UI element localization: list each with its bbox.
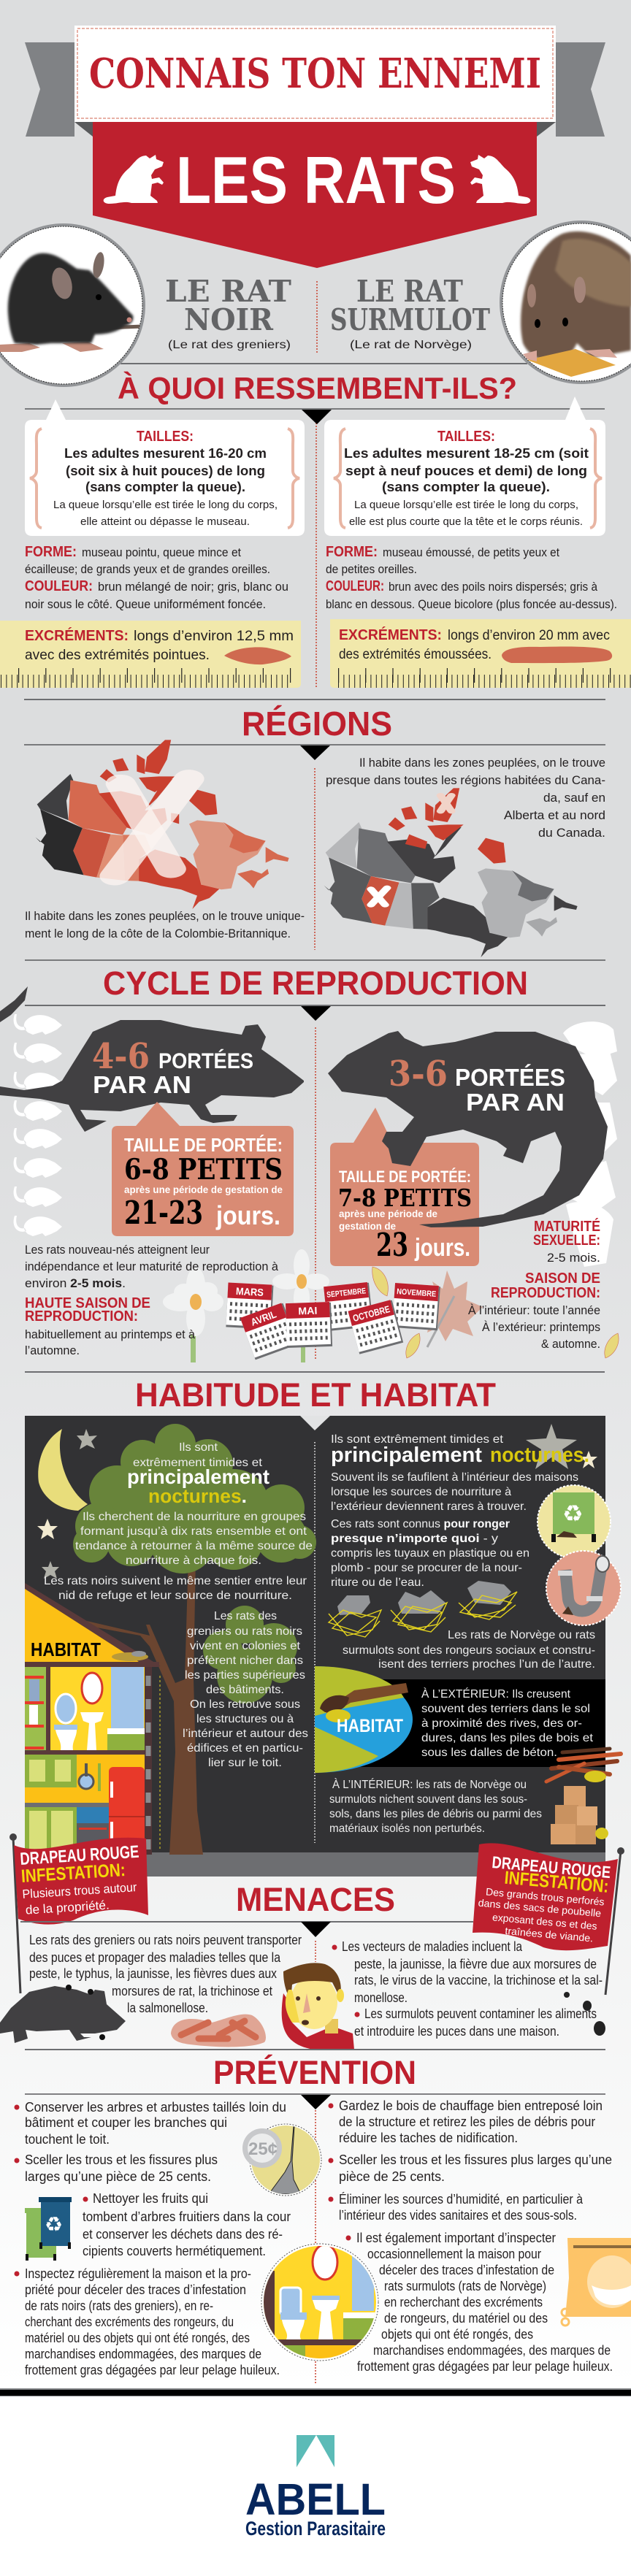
text: colonies, black rat: greniers ou rats noirs xyxy=(187,1625,302,1638)
text: maturity and season, brown rat: 2-5 mois. xyxy=(547,1251,600,1265)
text: prevention list, right: en recherchant des excréments xyxy=(384,2295,543,2309)
text: prevention list, left: priété pour déceler des traces d’infestation xyxy=(25,2282,246,2297)
text: night habits, black rat: principalement xyxy=(127,1465,269,1488)
text: prevention list, left: cherchant des excréments des rongeurs, du xyxy=(25,2315,234,2329)
text: night habits, brown rat: compris les tuyaux en plastique ou en xyxy=(331,1547,529,1560)
rat silhouette tail under: callout, brown rat: 23 xyxy=(376,1227,408,1264)
flag: red flag, black rat: DRAPEAU ROUGE xyxy=(20,1842,139,1869)
icon: wall crack and quarter xyxy=(242,2124,321,2196)
rat silhouette tail under: callout, brown rat: 7-8 PETITS xyxy=(338,1184,472,1212)
text: prevention list, right: pièce de 25 cents. xyxy=(339,2169,445,2184)
text: prevention list, left: de rats noirs (rats des greniers), en re- xyxy=(25,2299,213,2313)
text: range, brown rat: da, sauf en xyxy=(543,791,605,805)
text: prevention list, left: Inspectez régulièrement la maison et la pro- xyxy=(25,2266,251,2281)
icon: daisies xyxy=(163,1249,329,1362)
icon: wall crack and quarter: 25¢ xyxy=(248,2139,278,2159)
ruler panel: droppings, black rat xyxy=(0,621,301,688)
icon: autumn leaves xyxy=(372,1267,619,1358)
rat silhouette: black rat: PORTÉES xyxy=(158,1049,253,1073)
text: prevention list, left: frottement gras dégagées par leur pelage huileux. xyxy=(25,2363,280,2377)
text: range, black rat xyxy=(25,909,305,940)
icon: wood pile xyxy=(546,1749,621,1782)
panel: size, brown rat: elle est plus courte que la tête et le corps réunis. xyxy=(349,515,583,528)
text: night habits, brown rat xyxy=(331,1433,589,1589)
text: maturity and season, brown rat xyxy=(468,1218,600,1351)
panel: outdoor habitat: souvent des terriers dans le sol xyxy=(421,1703,590,1715)
text: prevention list, right: objets qui ont été rongés, des xyxy=(381,2327,533,2342)
icon: calendars: MAI xyxy=(298,1305,318,1316)
text: night habits, brown rat: Ils sont extrêmement timides et xyxy=(331,1433,504,1446)
text: threats, brown rat: rats, le virus de la vaccine, la trichinose et la sal- xyxy=(354,1973,603,1987)
panel: size, black rat: elle atteint ou dépasse le museau. xyxy=(80,515,250,528)
photo: brown rat xyxy=(500,221,631,384)
logo: Abell xyxy=(245,2435,386,2539)
text: maturity and season, brown rat: REPRODUCTION: xyxy=(491,1285,600,1301)
species names: rat noir: (Le rat des greniers) xyxy=(168,339,291,351)
callout: litter size, black rat: TAILLE DE PORTÉE: xyxy=(124,1134,283,1156)
rat silhouette: brown rat: PORTÉES xyxy=(455,1064,565,1091)
text: night habits, brown rat: nocturnes. xyxy=(490,1444,589,1467)
text: colonies, black rat: les parties supérieures xyxy=(185,1669,305,1682)
text: colonies, black rat: lier sur le toit. xyxy=(208,1757,282,1769)
arrow marker xyxy=(301,2095,331,2109)
text: night habits, brown rat: l’extérieur deviennent rares à trouver. xyxy=(331,1500,527,1513)
rat silhouette tail under: callout, brown rat: après une période de xyxy=(339,1208,437,1219)
heading: prévention: PRÉVENTION xyxy=(213,2054,416,2091)
text: indoor habitat: surmulots nichent souvent dans les sous- xyxy=(329,1793,527,1806)
text: prevention list, right: de rongeurs, du matériel ou des xyxy=(384,2311,548,2326)
text: night habits, brown rat: principalement xyxy=(331,1444,482,1467)
text: prevention list, left xyxy=(15,2100,291,2377)
ruler panel: droppings, brown rat xyxy=(330,619,631,688)
text: prevention list, left: cipients couverts hermétiquement. xyxy=(83,2244,266,2258)
text: prevention list, left: touchent le toit. xyxy=(25,2132,110,2147)
text: night habits, black rat: Ils sont xyxy=(179,1441,218,1454)
rat silhouette: brown rat: 3-6 xyxy=(389,1054,448,1095)
text: colonies, black rat: Les rats des xyxy=(214,1610,277,1622)
species names: rat noir: NOIR xyxy=(184,302,274,337)
text: range, black rat: Il habite dans les zones peuplées, on le trouve unique- xyxy=(25,909,305,923)
text: night habits, brown rat: plomb - pour se procurer de la nour- xyxy=(331,1562,522,1574)
icon: droppings plate xyxy=(171,2015,266,2047)
panel: outdoor habitat: dures, dans les piles de bois et xyxy=(421,1732,594,1744)
panel: size, black rat: Les adultes mesurent 16-20 cm xyxy=(64,446,267,461)
text: night habits, black rat: formant jusqu’à dix rats ensemble et ont xyxy=(80,1525,307,1538)
text: night habits, black rat: nocturnes. xyxy=(148,1485,247,1507)
icon: chewed pipe circle xyxy=(546,1551,621,1625)
text: shape and colour, brown rat: brun avec des poils noirs dispersés; gris à xyxy=(389,580,597,594)
text: prevention list, right: Éliminer les sources d’humidité, en particulier à xyxy=(339,2192,584,2207)
text: shape and colour, brown rat: COULEUR: xyxy=(326,578,384,594)
map: Canada, black rat range xyxy=(35,740,289,909)
text: maturity and season, brown rat: & automne. xyxy=(541,1337,600,1351)
text: prevention list, left: matériel ou des objets qui ont été rongés, des xyxy=(25,2331,250,2345)
text: colonies, black rat: édifices et en particu- xyxy=(187,1742,303,1755)
text: threats, black rat: morsures de rat, la trichinose et xyxy=(112,1984,272,1998)
species names: rat surmulot xyxy=(330,274,490,351)
icon: worried man xyxy=(282,1963,354,2050)
text: night habits, brown rat: presque n’importe quoi - y xyxy=(331,1533,498,1545)
ribbon: grey banner behind title xyxy=(25,42,605,137)
text: night habits, brown rat: Ces rats sont connus pour ronger xyxy=(331,1518,510,1530)
panel: outdoor habitat: À L’EXTÉRIEUR: Ils creusent xyxy=(421,1687,571,1701)
text: maturity and season, brown rat: À l’intérieur: toute l’année xyxy=(468,1303,600,1317)
text: prevention list, right xyxy=(329,2098,613,2374)
text: shape and colour, black rat: COULEUR: xyxy=(25,578,93,594)
red banner: Les rats: LES RATS xyxy=(176,144,456,218)
text: threats, brown rat: et introduire les puces dans une maison. xyxy=(354,2024,559,2039)
text: prevention list, left: Conserver les arbres et arbustes taillés loin du xyxy=(25,2100,286,2115)
heading: cycle de reproduction: CYCLE DE REPRODUCTION xyxy=(103,965,528,1002)
text: social rats, brown rat: Les rats de Norvège ou rats xyxy=(448,1629,595,1641)
panel: size, black rat: (soit six à huit pouces) de long xyxy=(66,464,265,478)
icon: rat with fleas xyxy=(0,1985,126,2043)
flag: red flag, black rat: INFESTATION: xyxy=(20,1860,126,1887)
arrow marker xyxy=(300,745,330,760)
text: indoor habitat: sols, dans les piles de débris ou parmi des xyxy=(329,1808,542,1820)
text: prevention list, left: marchandises endommagées, des marques de xyxy=(25,2347,261,2361)
species names: rat noir: LE RAT xyxy=(165,274,291,309)
logo: Abell: ABELL xyxy=(245,2475,386,2524)
ruler panel: droppings, black rat: avec des extrémités pointues. xyxy=(25,648,210,663)
text: shape and colour, brown rat: de petites oreilles. xyxy=(326,562,417,576)
icon: calendars: SEPTEMBRE xyxy=(326,1287,367,1300)
text: prevention list, left: Nettoyer les fruits qui xyxy=(93,2191,208,2206)
panel: outdoor habitat: sous les dalles de béton. xyxy=(421,1747,557,1759)
icon: rats in nests xyxy=(329,1581,517,1637)
text: indoor habitat: À L’INTÉRIEUR: les rats de Norvège ou xyxy=(332,1777,527,1791)
panel: size, brown rat xyxy=(324,396,605,536)
panel: size, brown rat: (sans compter la queue). xyxy=(382,480,550,494)
text: independence, black rat: l’automne. xyxy=(25,1343,80,1357)
footer band xyxy=(0,2388,631,2396)
icon: cereal bag xyxy=(562,2238,631,2326)
text: prevention list, right: rats surmulots (rats de Norvège) xyxy=(384,2279,546,2293)
text: night habits, brown rat: riture ou de l’eau. xyxy=(331,1576,424,1589)
text: colonies, black rat: On les retrouve sous xyxy=(190,1698,300,1711)
text: shape and colour, black rat xyxy=(25,544,288,611)
text: independence, black rat xyxy=(25,1243,279,1357)
text: night habits, black rat: tendance à retourner à la même source de xyxy=(75,1540,313,1552)
ruler panel: droppings, brown rat: des extrémités émoussées. xyxy=(339,647,492,662)
callout: litter size, black rat xyxy=(112,1102,294,1236)
photo: black rat xyxy=(0,223,145,387)
icon: garbage bins xyxy=(25,2197,72,2261)
text: threats, black rat: des puces et propager des maladies telles que la xyxy=(29,1950,281,1965)
icon: calendars: MARS xyxy=(236,1285,264,1298)
text: maturity and season, brown rat: MATURITÉ xyxy=(534,1218,600,1235)
heading: régions: RÉGIONS xyxy=(242,705,392,743)
text: threats, brown rat: monellose. xyxy=(354,1990,408,2005)
text: threats, brown rat: Les vecteurs de maladies incluent la xyxy=(342,1939,523,1954)
illustration: house cross-section xyxy=(25,1583,161,1855)
text: range, brown rat: Alberta et au nord xyxy=(504,808,605,822)
text: range, brown rat: presque dans toutes les régions habitées du Cana- xyxy=(326,773,605,787)
text: independence, black rat: habituellement au printemps et à xyxy=(25,1327,196,1341)
text: prevention list, right: occasionnellement la maison pour xyxy=(367,2247,541,2261)
rat silhouette tail under: callout, brown rat: jours. xyxy=(414,1234,470,1262)
ruler panel: droppings, brown rat: EXCRÉMENTS: xyxy=(339,626,442,643)
text: range, brown rat xyxy=(326,756,605,840)
species names: rat surmulot: (Le rat de Norvège) xyxy=(350,339,472,351)
icon: cardboard boxes xyxy=(551,1786,608,1844)
text: night habits, brown rat: Souvent ils se faufilent à l’intérieur des maisons xyxy=(331,1471,578,1484)
text: prevention list, right: l’intérieur des vides sanitaires et des sous-sols. xyxy=(339,2208,577,2223)
callout: litter size, black rat: 6-8 PETITS xyxy=(124,1153,283,1187)
text: prevention list, right: Il est également important d’inspecter xyxy=(356,2231,556,2245)
flag: red flag, brown rat: Des grands trous perforés xyxy=(485,1885,605,1908)
text: prevention list, left: Sceller les trous et les fissures plus xyxy=(25,2153,218,2167)
text: threats, black rat: la salmonellose. xyxy=(127,2001,208,2015)
heading: menaces: MENACES xyxy=(236,1881,395,1918)
text: night habits, black rat: Ils cherchent de la nourriture en groupes xyxy=(83,1511,306,1523)
rat silhouette tail under: callout, brown rat: TAILLE DE PORTÉE: xyxy=(339,1168,471,1186)
flag: red flag, brown rat: traînées de viande. xyxy=(505,1925,594,1944)
species names: rat surmulot: SURMULOT xyxy=(330,302,490,337)
panel: outdoor habitat xyxy=(315,1666,605,1773)
text: night habits, black rat: Les rats noirs suivent le même sentier entre leur xyxy=(44,1575,307,1587)
callout: litter size, black rat: 21-23 xyxy=(124,1195,203,1232)
arrow marker xyxy=(301,1006,331,1021)
text: prevention list, left: tombent d’arbres fruitiers dans la cour xyxy=(83,2209,291,2224)
text: prevention list, right: Gardez le bois de chauffage bien entreposé loin xyxy=(339,2098,603,2113)
text: social rats, brown rat: isent des terriers proches l’un de l’autre. xyxy=(378,1658,595,1671)
text: night habits, black rat: nourriture à chaque fois. xyxy=(126,1555,261,1567)
text: shape and colour, black rat: noir sous le côté. Queue uniformément foncée. xyxy=(25,597,266,611)
icon: column of large white rats xyxy=(563,1021,617,1267)
rat silhouette tail under: callout, brown rat: gestation de xyxy=(339,1220,396,1232)
text: prevention list, left: et conserver les déchets dans des ré- xyxy=(83,2227,283,2242)
text: threats, brown rat xyxy=(332,1939,603,2039)
text: colonies, black rat xyxy=(183,1610,308,1769)
text: threats, brown rat: Les surmulots peuvent contaminer les aliments xyxy=(364,2006,597,2021)
panel: outdoor habitat: à proximité des rives, des or- xyxy=(421,1717,582,1730)
text: prevention list, left: larges qu’une pièce de 25 cents. xyxy=(25,2169,211,2184)
icon: recycling bin circle xyxy=(538,1485,611,1558)
text: shape and colour, brown rat: museau émoussé, de petits yeux et xyxy=(383,545,559,559)
callout: litter size, black rat: jours. xyxy=(215,1200,280,1230)
heading: habitude et habitat: HABITUDE ET HABITAT xyxy=(135,1376,496,1414)
text: threats, black rat: Les rats des greniers ou rats noirs peuvent transporter xyxy=(29,1933,302,1947)
text: indoor habitat xyxy=(329,1777,542,1835)
species names: rat surmulot: LE RAT xyxy=(356,274,463,309)
text: night habits, black rat: nid de refuge et leur source de nourriture. xyxy=(58,1590,292,1602)
text: threats, brown rat: peste, la jaunisse, la fièvre due aux morsures de xyxy=(354,1957,597,1971)
illustration: tree xyxy=(73,1424,316,1855)
red banner: Les rats xyxy=(93,122,537,268)
text: shape and colour, brown rat: FORME: xyxy=(326,544,378,560)
rat silhouette: black rat: 4-6 xyxy=(92,1036,150,1077)
text: range, black rat: ment le long de la côte de la Colombie-Britannique. xyxy=(25,927,291,940)
panel: size, black rat xyxy=(25,399,305,536)
heading: à quoi ressemblent-ils: À QUOI RESSEMBENT-ILS? xyxy=(118,371,517,405)
text: maturity and season, brown rat: SEXUELLE: xyxy=(533,1233,600,1249)
flag: red flag, brown rat: INFESTATION: xyxy=(504,1868,610,1897)
panel: dark habitat background xyxy=(25,1416,605,1877)
ruler panel: droppings, brown rat: longs d’environ 20 mm avec xyxy=(448,628,610,643)
panel: outdoor habitat: HABITAT xyxy=(337,1716,403,1736)
text: shape and colour, black rat: museau pointu, queue mince et xyxy=(82,545,241,559)
icon: recycling bin circle: ♻ xyxy=(562,1500,584,1527)
text: colonies, black rat: des bâtiments. xyxy=(206,1684,284,1696)
rat silhouette: black rat xyxy=(0,986,304,1132)
text: night habits, black rat xyxy=(44,1441,313,1602)
rat silhouette: brown rat xyxy=(328,1031,608,1227)
text: shape and colour, black rat: brun mélangé de noir; gris, blanc ou xyxy=(98,580,288,594)
arrow marker xyxy=(301,1922,331,1937)
rat silhouette: black rat: PAR AN xyxy=(93,1071,191,1098)
panel: size, brown rat: Les adultes mesurent 18-25 cm (soit xyxy=(344,446,589,461)
text: shape and colour, brown rat xyxy=(326,544,617,611)
title panel: Connais ton ennemi: CONNAIS TON ENNEMI xyxy=(89,50,541,98)
text: independence, black rat: indépendance et leur maturité de reproduction à xyxy=(25,1260,279,1273)
text: maturity and season, brown rat: À l’extérieur: printemps xyxy=(482,1320,600,1334)
flag: red flag, black rat: Plusieurs trous autour xyxy=(22,1880,137,1901)
flag: red flag, black rat xyxy=(9,1833,148,1993)
logo: Abell: Gestion Parasitaire xyxy=(245,2518,386,2539)
icon: calendars xyxy=(226,1282,440,1360)
ruler panel: droppings, black rat: EXCRÉMENTS: xyxy=(25,627,129,644)
text: independence, black rat: HAUTE SAISON DE xyxy=(25,1295,150,1311)
flag: red flag, brown rat xyxy=(473,1843,624,1995)
text: independence, black rat: environ 2-5 mois. xyxy=(25,1276,126,1290)
text: range, brown rat: Il habite dans les zones peuplées, on le trouve xyxy=(359,756,605,770)
title panel: Connais ton ennemi xyxy=(74,26,556,122)
icon: calendars: OCTOBRE xyxy=(351,1303,391,1324)
text: social rats, brown rat xyxy=(343,1629,595,1671)
text: independence, black rat: Les rats nouveau-nés atteignent leur xyxy=(25,1243,210,1257)
map: Canada, brown rat range xyxy=(324,788,578,957)
text: colonies, black rat: les structures ou à xyxy=(196,1713,294,1725)
text: prevention list, right: déceler des traces d’infestation de xyxy=(379,2263,554,2277)
text: prevention list, left: bâtiment et couper les branches qui xyxy=(25,2115,227,2130)
panel: size, black rat: (sans compter la queue). xyxy=(85,480,245,494)
icon: garbage bins: ♻ xyxy=(45,2212,63,2236)
text: maturity and season, brown rat: SAISON DE xyxy=(525,1270,600,1287)
divider line above heading xyxy=(121,363,527,364)
text: social rats, brown rat: surmulots sont des rongeurs sociaux et constru- xyxy=(343,1644,595,1657)
text: colonies, black rat: l’intérieur et autour des xyxy=(183,1728,308,1740)
text: threats, black rat: peste, le typhus, la jaunisse, les fièvres dues aux xyxy=(29,1966,277,1981)
text: threats, black rat xyxy=(29,1933,302,2015)
arrow marker xyxy=(302,410,332,424)
panel: size, black rat: TAILLES: xyxy=(137,429,194,445)
icon: calendars: AVRIL xyxy=(249,1308,278,1328)
icon: row of small white rats xyxy=(14,1014,62,1236)
text: range, brown rat: du Canada. xyxy=(538,826,605,840)
icon: bathroom circle xyxy=(261,2244,378,2361)
text: prevention list, right: de la structure et retirez les piles de débris pour xyxy=(339,2115,595,2129)
icon: moon and stars xyxy=(37,1424,597,1579)
text: night habits, black rat: extrêmement timides et xyxy=(133,1457,263,1469)
rat silhouette: brown rat: PAR AN xyxy=(466,1089,565,1116)
flag: red flag, black rat: de la propriété. xyxy=(25,1898,110,1917)
panel: size, brown rat: TAILLES: xyxy=(437,429,495,445)
callout: litter size, black rat: après une période de gestation de xyxy=(124,1184,283,1195)
text: shape and colour, black rat: écailleuse; de grands yeux et de grandes oreilles. xyxy=(25,562,270,576)
text: prevention list, right: Sceller les trous et les fissures plus larges qu’une xyxy=(339,2153,612,2167)
panel: size, brown rat: sept à neuf pouces et demi) de long xyxy=(345,464,587,478)
ruler panel: droppings, black rat: longs d’environ 12,5 mm xyxy=(134,629,294,644)
species names: rat noir xyxy=(165,274,291,351)
text: colonies, black rat: vivent en colonies et xyxy=(190,1640,301,1652)
icon: fleas xyxy=(564,1992,605,2036)
text: independence, black rat: REPRODUCTION: xyxy=(25,1308,138,1325)
text: indoor habitat: matériaux isolés non perturbés. xyxy=(329,1822,485,1835)
flag: red flag, brown rat: dans des sacs de poubelle xyxy=(478,1897,602,1919)
text: shape and colour, black rat: FORME: xyxy=(25,544,77,560)
illustration: house cross-section: HABITAT xyxy=(31,1638,101,1660)
text: prevention list, right: réduire les taches de nidification. xyxy=(339,2131,518,2145)
text: night habits, brown rat: lorsque les sources de nourriture à xyxy=(331,1486,511,1498)
icon: calendars: NOVEMBRE xyxy=(397,1287,437,1299)
text: colonies, black rat: préfèrent nicher dans xyxy=(187,1655,303,1667)
rat silhouette tail under: callout, brown rat xyxy=(330,1108,479,1266)
flag: red flag, brown rat: exposant des os et des xyxy=(492,1911,597,1932)
panel: size, black rat: La queue lorsqu’elle est tirée le long du corps, xyxy=(53,499,278,511)
panel: size, brown rat: La queue lorsqu’elle est tirée le long du corps, xyxy=(354,499,578,511)
